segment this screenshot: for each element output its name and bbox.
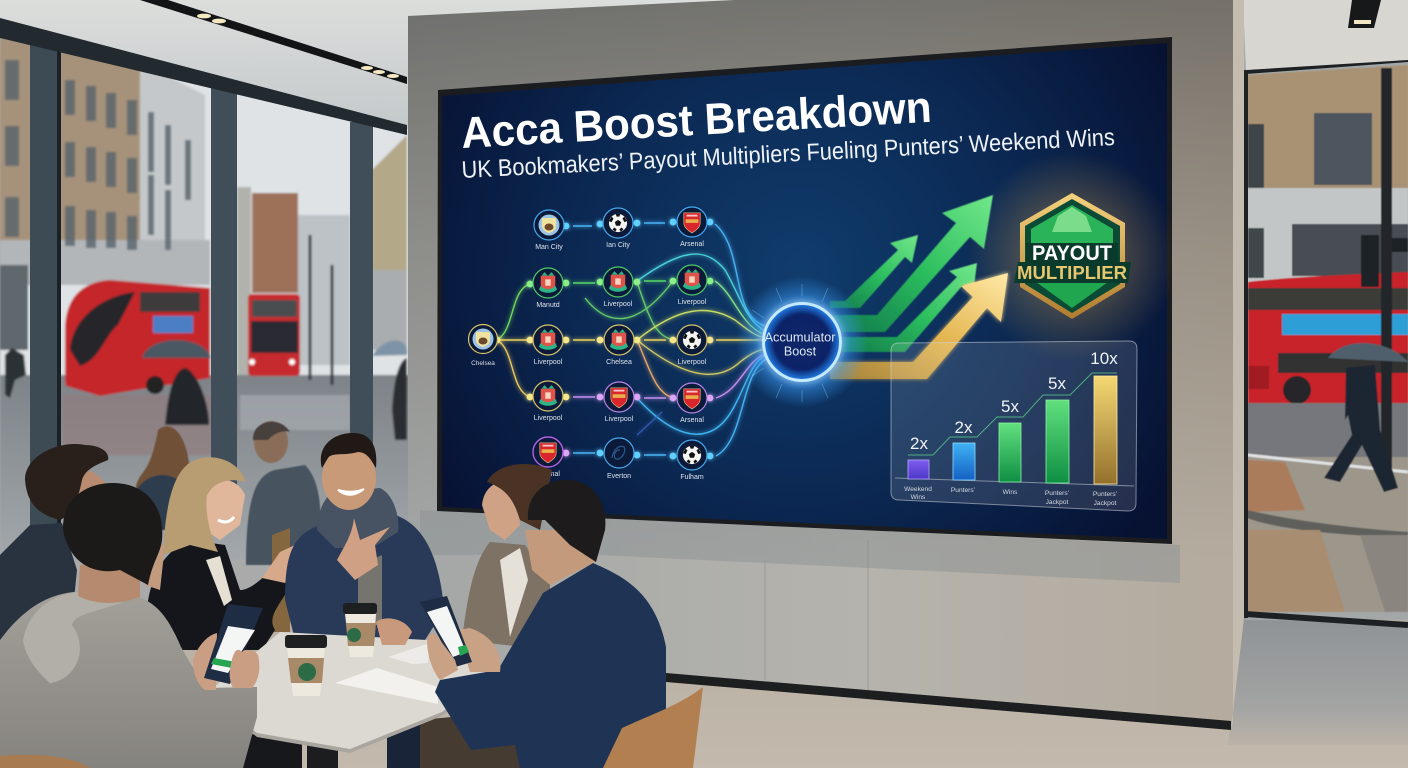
top right ceiling bbox=[1243, 0, 1408, 70]
connector dots bbox=[494, 219, 713, 459]
bar: Weekend Wins 2x: Wins bbox=[911, 494, 926, 501]
node: Liverpool row 2 centre bbox=[603, 267, 633, 308]
left window mullions bbox=[30, 40, 373, 540]
bar: Weekend Wins 2x bbox=[904, 434, 932, 501]
pedestrian with umbrella right bbox=[372, 340, 407, 440]
bar: Weekend Wins 2x: Weekend bbox=[904, 486, 932, 493]
bar: Punters Jackpot 5x: Punters’ bbox=[1045, 490, 1070, 497]
wall screen display bbox=[442, 43, 1177, 539]
accumulator boost orb bbox=[736, 276, 868, 408]
node: Ian City ball: Ian City bbox=[606, 242, 630, 249]
table leg bbox=[307, 745, 338, 768]
orb label: Accumulator bbox=[764, 330, 836, 344]
phone left bbox=[204, 604, 263, 684]
storefront bbox=[0, 265, 28, 350]
node: ball row 5: Fulham bbox=[680, 474, 704, 481]
node: Arsenal row 5: Arsenal bbox=[536, 471, 560, 478]
wooden chair behind group bbox=[272, 528, 290, 632]
bus: right red double decker bbox=[1248, 272, 1408, 403]
ceiling spotlight bbox=[1348, 0, 1381, 28]
chart baseline bbox=[895, 478, 1134, 486]
bar: Wins 5x: 5x bbox=[1001, 397, 1019, 416]
person: left man in navy hoodie bbox=[0, 444, 110, 640]
node: Everton row 5: Everton bbox=[607, 473, 631, 480]
bar: Punters Jackpot 10x: Jackpot bbox=[1094, 500, 1117, 507]
person: foreground man in grey hoodie bbox=[0, 483, 257, 768]
wall screen bezel bbox=[437, 37, 1172, 544]
node: Liverpool row 2 right: Liverpool bbox=[678, 299, 707, 306]
pedestrian with umbrella bbox=[1324, 343, 1408, 492]
node: Arsenal row 4 centre: Liverpool bbox=[605, 416, 634, 423]
right window: street with bus bbox=[1245, 60, 1408, 620]
ceiling light track bbox=[140, 0, 407, 84]
bar: Weekend Wins 2x: 2x bbox=[910, 434, 928, 453]
payout multiplier badge: MULTIPLIER bbox=[1017, 263, 1127, 283]
node: ball row 3 right: Liverpool bbox=[678, 359, 707, 366]
node: Manchester bbox=[533, 268, 563, 309]
person: woman in beige jacket bbox=[462, 464, 552, 650]
concrete wall bbox=[408, 0, 1244, 730]
floor bbox=[0, 620, 1408, 768]
badge glow bbox=[967, 151, 1177, 361]
small paper on table bbox=[388, 643, 430, 664]
node: Manchester: Manutd bbox=[536, 302, 560, 309]
node: ball row 3 right bbox=[677, 325, 707, 366]
node: Liverpool row 3 left bbox=[533, 325, 563, 366]
person: laughing man in navy blazer bbox=[285, 433, 444, 640]
bar: Wins 5x bbox=[999, 397, 1021, 496]
lamp pole bbox=[1381, 68, 1392, 478]
hand on right phone bbox=[427, 633, 458, 680]
hand on left phone bbox=[230, 650, 259, 688]
subtitle: UK Bookmakers’ Payout Multipliers Fueling Punters’ Weekend Wins bbox=[461, 124, 1115, 184]
bus: near red double decker bbox=[65, 280, 210, 396]
building: distant brick block bbox=[237, 187, 251, 377]
paper sheet on table bbox=[335, 668, 438, 704]
pedestrian with umbrella bbox=[142, 340, 211, 425]
pedestrian left bbox=[5, 348, 26, 398]
building: white ground floor bbox=[1247, 188, 1408, 283]
bar: Punters Jackpot 10x bbox=[1090, 349, 1118, 507]
node: Liverpool row 3 left: Liverpool bbox=[534, 359, 563, 366]
node: Liverpool row 4: Liverpool bbox=[534, 415, 563, 422]
table bbox=[207, 632, 495, 753]
right window frame bbox=[1246, 60, 1408, 625]
building: brick facade bbox=[0, 30, 140, 250]
bar: Punters Jackpot 10x: Punters’ bbox=[1093, 491, 1118, 498]
node: Arsenal row 5 bbox=[533, 437, 563, 478]
node: Chelsea start: Chelsea bbox=[471, 360, 495, 367]
arrow: third green bbox=[832, 263, 977, 352]
building: white stone facade bbox=[0, 62, 205, 285]
badge text: PAYOUT bbox=[1032, 242, 1112, 265]
node: Arsenal row 4 right: Arsenal bbox=[680, 417, 704, 424]
background seated man bbox=[246, 421, 321, 565]
background seated woman bbox=[136, 426, 192, 530]
node: Liverpool row 2 right bbox=[677, 265, 707, 306]
node: Liverpool row 4 bbox=[533, 381, 563, 422]
connection lines: accumulator network bbox=[497, 223, 766, 456]
street surface bbox=[0, 375, 410, 560]
node: Ian City ball bbox=[603, 208, 633, 249]
person: blonde woman in black jacket bbox=[145, 457, 312, 650]
bar: Punters Jackpot 5x bbox=[1045, 374, 1070, 506]
node: Arsenal row 4 centre bbox=[604, 382, 634, 423]
node: Man City: Man City bbox=[535, 244, 563, 251]
arrow: gold bbox=[830, 273, 1008, 379]
bus: far red double decker bbox=[248, 294, 300, 376]
ceiling bbox=[0, 0, 1244, 130]
node: Liverpool row 2 centre: Liverpool bbox=[604, 301, 633, 308]
road and kerb bbox=[1247, 403, 1408, 463]
wooden chair right bbox=[603, 687, 703, 768]
wet floor by right window bbox=[1228, 618, 1408, 745]
lamp posts bbox=[310, 235, 332, 385]
node: Chelsea row 3 centre: Chelsea bbox=[606, 359, 632, 366]
bar: Punters Jackpot 5x: Jackpot bbox=[1046, 499, 1069, 506]
node: Arsenal row 4 right bbox=[677, 383, 707, 424]
trousers under table bbox=[243, 710, 525, 768]
node: ball row 5 bbox=[677, 440, 707, 481]
badge ribbon bbox=[1014, 243, 1131, 283]
bar: Punters 2x bbox=[951, 418, 976, 494]
node: Arsenal top bbox=[677, 207, 707, 248]
coffee cup front bbox=[285, 635, 327, 696]
arrow: back green bbox=[830, 235, 918, 308]
left window: rainy London street bbox=[0, 0, 410, 560]
coffee cup back bbox=[343, 603, 377, 657]
title: Acca Boost Breakdown bbox=[460, 83, 933, 158]
bar: Wins 5x: Wins bbox=[1003, 489, 1018, 496]
wooden chair left bbox=[0, 755, 90, 768]
bar: Punters Jackpot 5x: 5x bbox=[1048, 374, 1066, 393]
bar: Punters Jackpot 10x: 10x bbox=[1090, 349, 1118, 368]
node: Chelsea start bbox=[468, 324, 498, 367]
node: Arsenal top: Arsenal bbox=[680, 241, 704, 248]
arrow: large green bbox=[832, 195, 993, 332]
node: Chelsea row 3 centre bbox=[604, 325, 634, 366]
central man's hand on table bbox=[376, 618, 412, 645]
chart trend line bbox=[908, 373, 1117, 455]
bar: Punters 2x: Punters’ bbox=[951, 487, 976, 494]
accumulator boost orb: Boost bbox=[784, 344, 817, 358]
building: upper brick bbox=[1247, 65, 1408, 190]
node: Everton row 5 bbox=[604, 438, 634, 480]
bar: Punters 2x: 2x bbox=[955, 418, 973, 437]
phone right bbox=[420, 596, 472, 667]
payout multiplier badge bbox=[1014, 193, 1131, 319]
chart panel bbox=[891, 341, 1137, 511]
node: Man City bbox=[534, 210, 564, 251]
person: foreground man in navy suit bbox=[435, 480, 666, 768]
